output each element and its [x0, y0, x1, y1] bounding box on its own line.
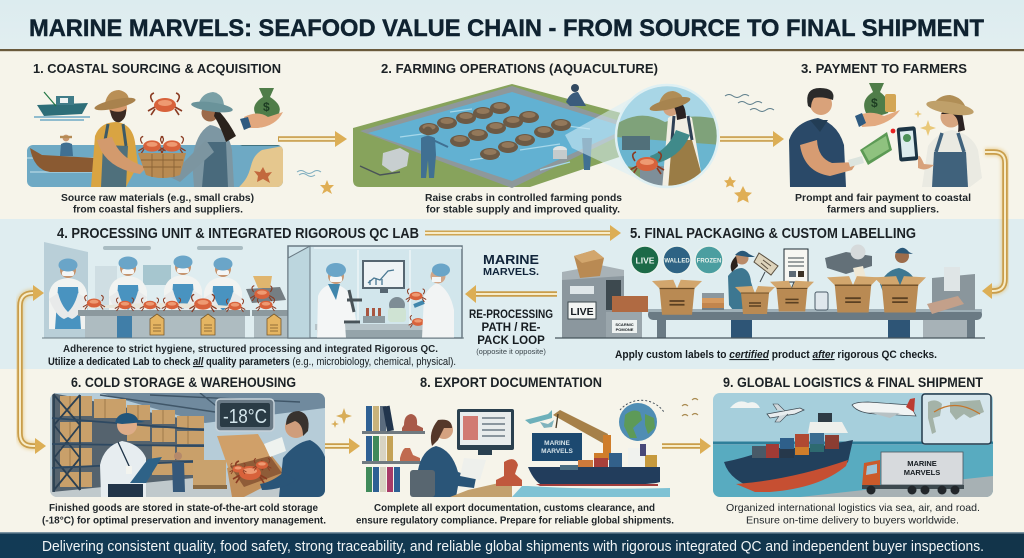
icon: money bag, coins and hand [855, 83, 900, 127]
icon: crab basket [138, 136, 186, 178]
decoration: waves and star 1 [297, 170, 334, 194]
figure: packer 1 [728, 251, 756, 338]
icon: hanging tag [754, 253, 778, 282]
title banner [0, 0, 1024, 51]
illustration: sourcing scene [27, 88, 284, 188]
logo: Marine Marvels: MARVELS. [483, 266, 539, 278]
caption 3 [795, 192, 971, 216]
icon: starfish [254, 167, 272, 183]
figure: fisher woman [168, 92, 236, 187]
table with crabs [78, 294, 294, 338]
icon: cargo crane with container: MARVELS [541, 448, 573, 455]
icon: frozen badge [695, 246, 723, 274]
warehouse racks with boxes [52, 393, 204, 492]
icon: crab tray [246, 276, 286, 311]
icon: binder shelves [362, 406, 425, 492]
decoration: waves and stars 2 [724, 94, 774, 203]
logo: Marine Marvels [483, 253, 539, 278]
icon: label printer [825, 244, 872, 279]
illustration: packaging line [555, 244, 985, 338]
icon: delivery truck: MARVELS [904, 468, 940, 477]
icon: small plane [525, 410, 552, 424]
label: re-processing path [469, 309, 553, 356]
icon: delivery truck: MARINE [907, 459, 937, 468]
caption 8: Complete all export documentation, customs clearance, and [374, 502, 655, 514]
heading 8: 8. EXPORT DOCUMENTATION [420, 374, 602, 390]
caption 5: Apply custom labels to certified product after rigorous QC checks. [615, 349, 937, 361]
figure: packer 2 [880, 248, 917, 338]
arrow: re-processing loop back to step 4 [465, 285, 557, 303]
caption 6 [42, 502, 326, 526]
heading 9: 9. GLOBAL LOGISTICS & FINAL SHIPMENT [723, 374, 983, 390]
caption 8 [356, 502, 674, 526]
label: re-processing path: RE-PROCESSING [469, 309, 553, 321]
caption 8: ensure regulatory compliance. Prepare for reliable global shipments. [356, 514, 674, 526]
caption 3: Prompt and fair payment to coastal [795, 192, 971, 204]
icon: delivery truck [862, 452, 964, 494]
figure: inspector with clipboard [100, 413, 162, 497]
icon: chilled badge: WALLED [664, 258, 690, 264]
icon: globe [619, 400, 664, 441]
illustration: payment scene [789, 83, 982, 187]
icon: red dot [891, 129, 895, 133]
illustration: warehouse [50, 393, 326, 497]
caption 2 [425, 192, 622, 216]
caption 9: Ensure on-time delivery to buyers worldwide. [746, 514, 959, 526]
panel: 6 cold storage [42, 374, 326, 526]
caption 4: Adherence to strict hygiene, structured processing and integrated Rigorous QC. [63, 343, 438, 355]
figure: pond worker [421, 126, 448, 178]
icon: small plane [767, 404, 804, 422]
icon: cargo crane with container: MARINE [544, 440, 570, 447]
icon: airliner [852, 398, 916, 418]
icon: ceiling lamps [103, 246, 243, 250]
heading 5: 5. FINAL PACKAGING & CUSTOM LABELLING [630, 225, 916, 242]
figure: distant worker [172, 452, 185, 492]
caption 6: Finished goods are stored in state-of-the-art cold storage [49, 502, 318, 514]
caption 9 [726, 502, 980, 526]
panel: 2 farming operations [353, 61, 722, 216]
caption 1: Source raw materials (e.g., small crabs) [61, 192, 254, 204]
icon: chilled badge [663, 246, 691, 274]
logo: Marine Marvels: MARINE [483, 253, 539, 267]
icon: pallet box [193, 460, 227, 489]
figure: rear worker and drum [553, 138, 592, 170]
figure: farmer woman with hat [918, 95, 982, 187]
icon: temperature display [216, 399, 274, 431]
icon: tablet [897, 126, 918, 162]
heading 1: 1. COASTAL SOURCING & ACQUISITION [33, 61, 281, 76]
label: re-processing path: PACK LOOP [477, 335, 545, 347]
heading 6: 6. COLD STORAGE & WAREHOUSING [71, 374, 296, 390]
caption 9: Organized international logistics via sea, air, and road. [726, 502, 980, 514]
decoration: sparkles [331, 408, 352, 428]
figure: farmer with basket [91, 90, 147, 187]
label: re-processing path: (opposite it opposite) [476, 347, 546, 356]
icon: packing machine: SCARNIC [615, 322, 634, 327]
arrow: step 1 to 2 [278, 131, 347, 147]
illustration: crab pond [353, 84, 722, 190]
arrow: double-headed connector step 4 to step 6 [20, 285, 46, 454]
heading 4: 4. PROCESSING UNIT & INTEGRATED RIGOROUS QC LAB [57, 225, 419, 242]
icon: frozen badge: FROZEN [697, 258, 721, 264]
caption 1: from coastal fishers and suppliers. [73, 204, 243, 216]
icon: container ship [512, 444, 670, 497]
arrow: step 3 down to step 5 [982, 152, 1005, 299]
QC lab glass room [288, 246, 462, 338]
panel: 9 global logistics [713, 374, 993, 526]
icon: magnified farmer circle [612, 84, 722, 190]
icon: desk, paper, stamp [450, 458, 522, 497]
footer banner: Delivering consistent quality, food safety, strong traceability, and reliable global shipments with rigorous integrated QC and independent buyer inspections. [42, 539, 984, 555]
icon: LIVE badge: LIVE [636, 256, 655, 266]
icon: container ship [724, 413, 853, 492]
panel: 5 final packaging [555, 225, 985, 361]
icon: money bag, coins and hand: $ [871, 96, 878, 110]
panel: 1 coastal sourcing [27, 61, 284, 216]
panel: 3 payment to farmers [789, 61, 982, 216]
icon: cash stack [848, 132, 892, 167]
icon: document [784, 249, 808, 292]
icon: packing machine: POMONE [616, 327, 634, 332]
icon: packing machine [562, 250, 648, 338]
icon: aerator machine [360, 148, 409, 175]
figure: man in navy polo [789, 88, 857, 187]
conveyor and boxes [648, 267, 982, 338]
caption 2: for stable supply and improved quality. [426, 204, 620, 216]
panel: 4 processing unit and QC lab [42, 225, 464, 368]
icon: money bag on hand [240, 88, 283, 130]
caption 4: Utilize a dedicated Lab to check all quality parameters (e.g., microbiology, chemical, physical). [48, 356, 456, 368]
icon: cargo crane with container [532, 410, 611, 461]
illustration: logistics scene [713, 393, 993, 497]
caption 1 [61, 192, 254, 216]
icon: rowing boat [30, 135, 96, 172]
beam: magnifier cone [565, 92, 642, 180]
illustration: processing line [42, 242, 464, 338]
heading 3: 3. PAYMENT TO FARMERS [801, 61, 967, 76]
decoration: birds [682, 398, 698, 416]
icon: LIVE badge [631, 246, 659, 274]
arrow: step 8 to step 9 [662, 438, 711, 454]
caption 3: farmers and suppliers. [827, 204, 939, 216]
caption 2: Raise crabs in controlled farming ponds [425, 192, 622, 204]
figure: staff holding box [260, 411, 326, 497]
icon: fishing boat [34, 92, 90, 120]
heading 2: 2. FARMING OPERATIONS (AQUACULTURE) [381, 61, 658, 76]
illustration: export office and ship [362, 400, 670, 497]
icon: open crab box [217, 434, 287, 497]
decoration: sparkles [914, 110, 936, 136]
title banner: MARINE MARVELS: SEAFOOD VALUE CHAIN - FROM SOURCE TO FINAL SHIPMENT [29, 15, 984, 42]
arrow: step 4 to step 5 [425, 225, 621, 241]
caption 6: (-18°C) for optimal preservation and inventory management. [42, 514, 326, 526]
icon: red crab [148, 93, 182, 115]
footer banner [0, 532, 1024, 558]
panel: 8 export documentation [356, 374, 674, 526]
inset: world map [922, 394, 991, 444]
figure: worker on bank [566, 84, 586, 106]
label: re-processing path: PATH / RE- [482, 322, 541, 334]
figure: clerk at monitor [410, 409, 514, 497]
icon: temperature display: -18°C [223, 406, 267, 428]
arrow: step 2 to 3 [720, 131, 784, 147]
icon: packing machine: LIVE [570, 306, 594, 318]
caption 4 [48, 343, 456, 368]
arrow: step 6 to step 8 [325, 438, 360, 454]
icon: money bag on hand: $ [263, 100, 270, 114]
